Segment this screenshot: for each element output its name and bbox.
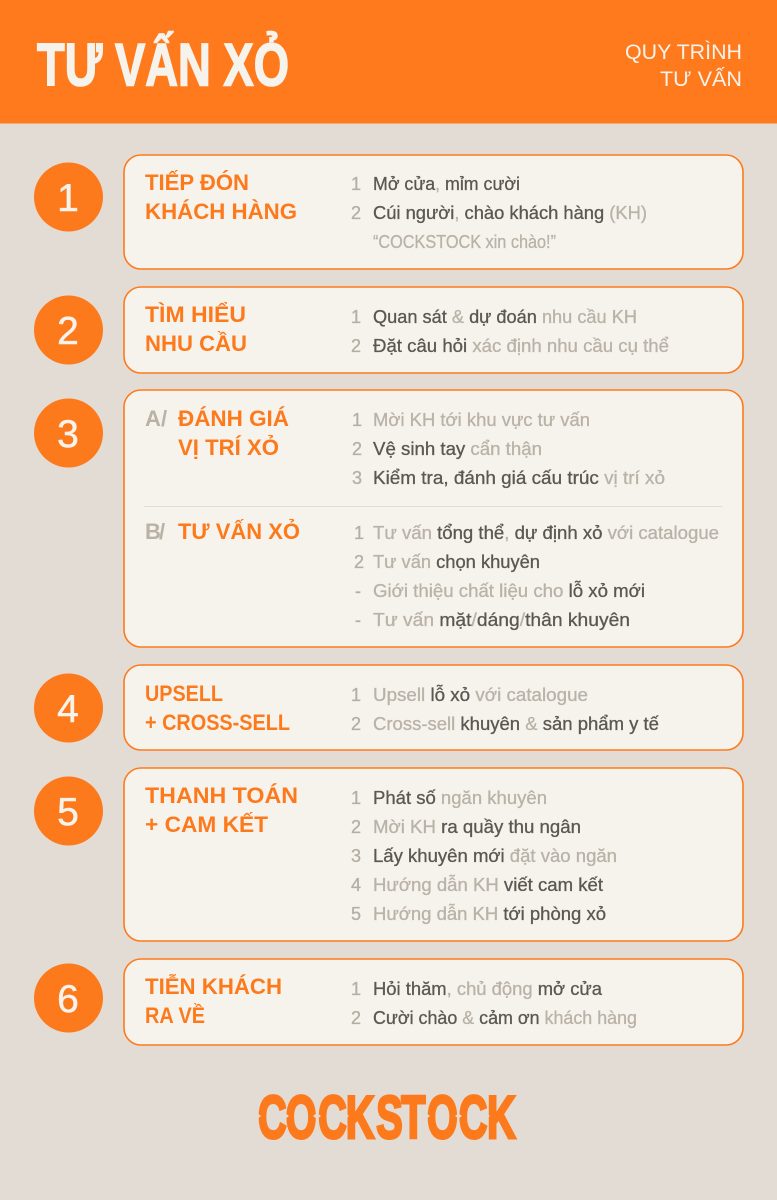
heading: step 6 — [145, 973, 282, 1028]
step 4 number: 4 — [57, 688, 79, 731]
list: step 2: Quan sát & dự đoán nhu cầu KH — [373, 307, 637, 327]
list: step 6: 1 — [351, 979, 361, 999]
heading: step 1 — [145, 170, 297, 224]
list: step 1: 2 — [351, 203, 361, 223]
step 1 number: 1 — [57, 177, 79, 220]
list: step 4: 2 — [351, 714, 361, 734]
heading: step 2 — [145, 302, 247, 356]
panel: step 3 — [124, 390, 743, 647]
list: step 5: Lấy khuyên mới đặt vào ngăn — [373, 846, 617, 866]
list: part B: Giới thiệu chất liệu cho lỗ xỏ mới — [373, 580, 645, 601]
list: part A — [352, 410, 665, 488]
heading: step 1: TIẾP ĐÓN — [145, 170, 249, 195]
step 4 number — [34, 674, 103, 742]
list: part B — [354, 523, 719, 630]
list: step 5: Hướng dẫn KH tới phòng xỏ — [373, 903, 606, 924]
heading: step 2: TÌM HIỂU — [145, 302, 246, 327]
list: step 5 — [351, 788, 617, 924]
list: step 1: Mở cửa, mỉm cười — [373, 174, 520, 194]
heading: step 6: RA VỀ — [145, 1003, 205, 1028]
heading: part A: ĐÁNH GIÁ — [178, 406, 289, 431]
heading: step 4: UPSELL — [145, 681, 223, 706]
subtitle — [625, 41, 742, 91]
list: step 1: 1 — [351, 174, 361, 194]
list: part A: Kiểm tra, đánh giá cấu trúc vị trí xỏ — [373, 468, 665, 488]
panel: step 6 — [124, 959, 743, 1045]
step 5 number — [34, 776, 103, 846]
step 1 number — [34, 162, 103, 232]
title: TƯ VẤN XỎ — [37, 32, 289, 98]
list: step 4 — [351, 684, 659, 734]
list: step 1: Cúi người, chào khách hàng (KH) — [373, 203, 647, 223]
list: step 4: 1 — [351, 685, 361, 705]
panel: step 1 — [124, 155, 743, 269]
list: step 5: Phát số ngăn khuyên — [373, 788, 547, 808]
step 6 number — [34, 964, 103, 1032]
list: step 6: Cười chào & cảm ơn khách hàng — [373, 1008, 637, 1028]
list: step 5: Mời KH ra quầy thu ngân — [373, 817, 581, 837]
subtitle: TƯ VẤN — [660, 68, 742, 91]
step 2 number — [34, 296, 103, 364]
list: step 5: 4 — [351, 875, 361, 895]
list: part A: 3 — [352, 468, 362, 488]
heading: step 4 — [145, 681, 290, 735]
list: step 6 — [351, 979, 637, 1028]
heading: part B: TƯ VẤN XỎ — [178, 519, 300, 544]
list: step 2: Đặt câu hỏi xác định nhu cầu cụ thể — [373, 336, 669, 356]
panel: step 4 — [124, 665, 743, 750]
list: step 2: 1 — [351, 307, 361, 327]
heading: part B: B/ — [145, 519, 165, 544]
heading: part A — [145, 406, 289, 460]
header band — [0, 0, 777, 124]
heading: step 5: + CAM KẾT — [145, 812, 269, 837]
list: part B: Tư vấn chọn khuyên — [373, 552, 540, 572]
list: part B: 2 — [354, 552, 364, 572]
list: step 5: 2 — [351, 817, 361, 837]
list: part B: - — [355, 610, 361, 630]
list: part A: 2 — [352, 439, 362, 459]
list: step 1 — [351, 174, 647, 252]
list: step 2 — [351, 307, 669, 356]
list: step 1: “COCKSTOCK xin chào!” — [373, 232, 556, 252]
subtitle: QUY TRÌNH — [625, 41, 742, 64]
logo: COCKSTOCK: COCKSTOCK — [258, 1084, 516, 1151]
list: step 2: 2 — [351, 336, 361, 356]
list: part B: 1 — [354, 523, 364, 543]
panel: step 5 — [124, 768, 743, 941]
panel: step 2 — [124, 287, 743, 373]
list: step 5: 1 — [351, 788, 361, 808]
list: part A: Mời KH tới khu vực tư vấn — [373, 410, 590, 430]
heading: part A: VỊ TRÍ XỎ — [178, 435, 279, 460]
list: step 5: 5 — [351, 904, 361, 924]
list: part B: - — [355, 581, 361, 601]
step 3 number — [34, 398, 103, 468]
list: step 4: Upsell lỗ xỏ với catalogue — [373, 684, 588, 705]
step 2 number: 2 — [57, 310, 79, 353]
heading: step 5 — [145, 783, 298, 837]
list: part B: Tư vấn tổng thể, dự định xỏ với catalogue — [373, 523, 719, 543]
heading: part A: A/ — [145, 406, 167, 431]
list: step 5: 3 — [351, 846, 361, 866]
list: step 6: 2 — [351, 1008, 361, 1028]
heading: step 6: TIỄN KHÁCH — [145, 973, 282, 999]
heading: step 4: + CROSS-SELL — [145, 710, 290, 735]
step 3 number: 3 — [57, 413, 79, 456]
step 6 number: 6 — [57, 978, 79, 1021]
list: step 5: Hướng dẫn KH viết cam kết — [373, 874, 603, 895]
list: step 6: Hỏi thăm, chủ động mở cửa — [373, 979, 603, 999]
list: part A: Vệ sinh tay cẩn thận — [373, 439, 542, 459]
heading: step 1: KHÁCH HÀNG — [145, 199, 297, 224]
list: step 4: Cross-sell khuyên & sản phẩm y tế — [373, 714, 659, 734]
step 5 number: 5 — [57, 791, 79, 834]
heading: step 5: THANH TOÁN — [145, 783, 298, 808]
heading: step 2: NHU CẦU — [145, 331, 247, 356]
list: part B: Tư vấn mặt/dáng/thân khuyên — [373, 610, 630, 630]
list: part A: 1 — [352, 410, 362, 430]
